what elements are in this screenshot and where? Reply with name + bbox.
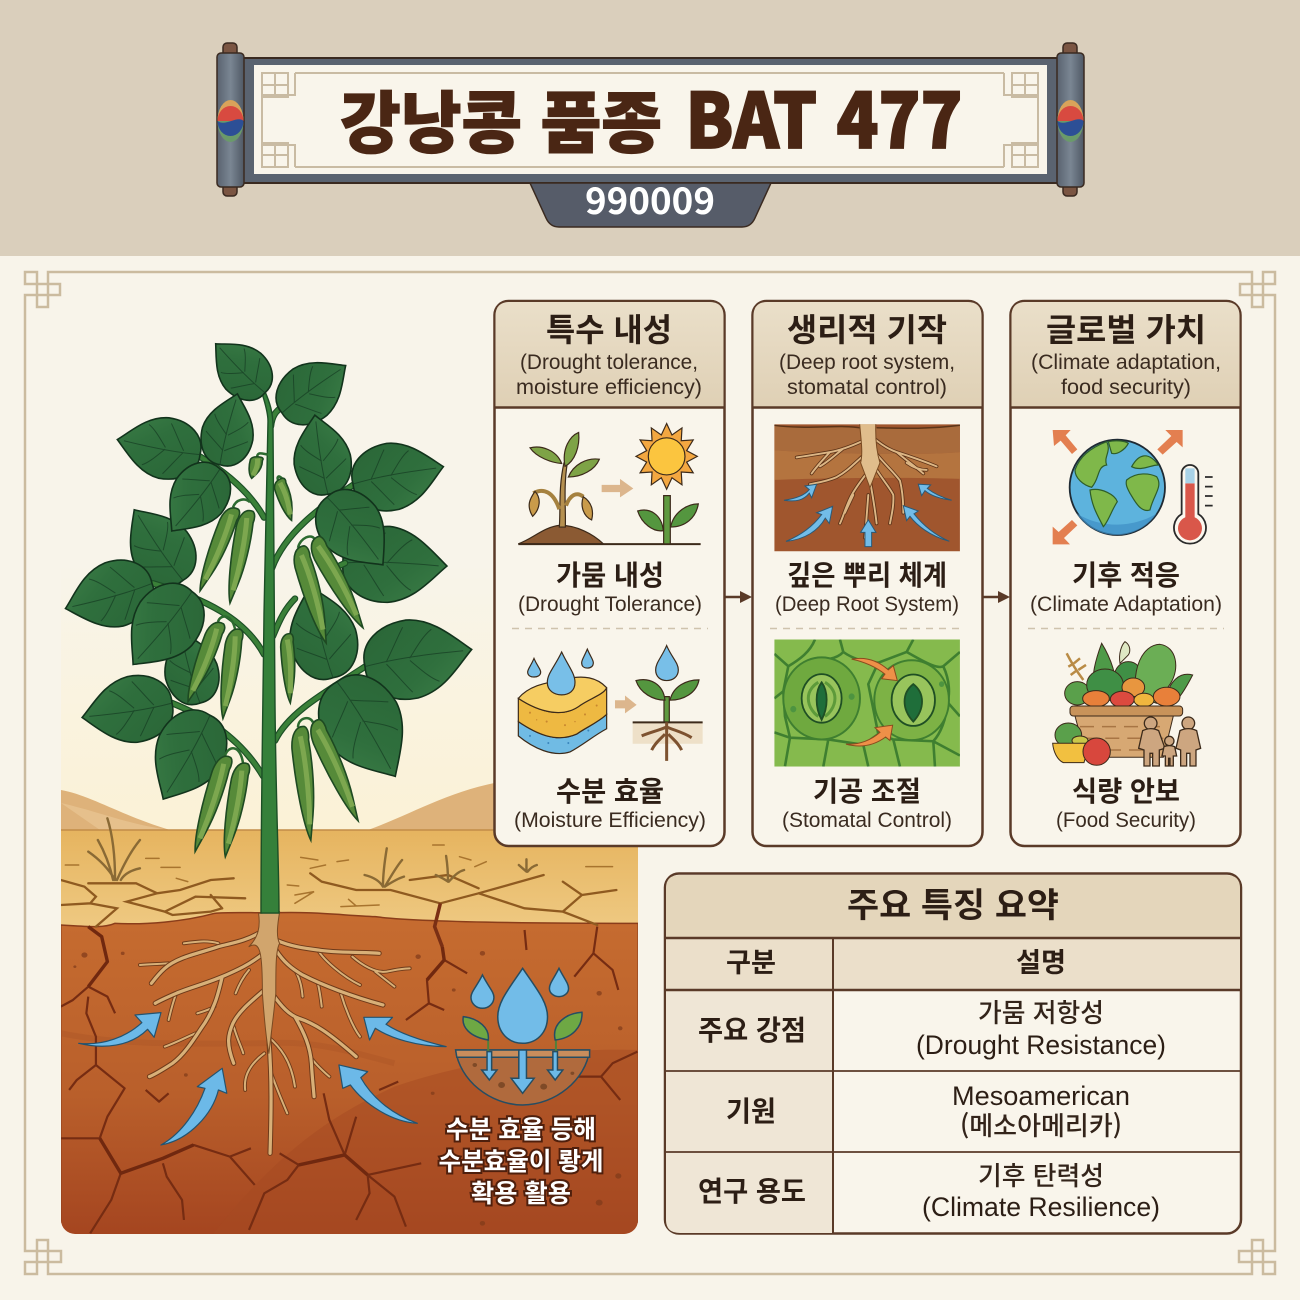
right scroll roller [1057,43,1084,196]
bean plant [57,326,478,913]
row: 연구 용도: (Climate Resilience) [922,1192,1160,1222]
row: 연구 용도: 연구 용도 [698,1170,806,1210]
row: 주요 강점: 가뭄 저항성 [978,993,1104,1030]
item title: (Deep Root System) [775,593,959,616]
icon: globe and thermometer [1053,430,1213,544]
panel heading [779,305,955,399]
panel heading: (Deep root system, [779,351,955,374]
panel heading: 생리적 기작 [787,305,947,351]
front leaves [57,326,478,816]
grass tufts [88,818,537,887]
item title: (Climate Adaptation) [1030,593,1222,616]
item title: 기공 조절 [813,770,921,810]
panel: 특수 내성 [494,301,724,846]
panel heading: (Climate adaptation, [1031,351,1221,374]
root system [140,912,410,1153]
row: 주요 강점 [698,993,1166,1060]
panel heading: food security) [1061,376,1191,399]
table title: 주요 특징 요약 [847,878,1059,927]
desert hills [61,781,505,830]
arrow: panel 2 to 3 [983,591,1010,603]
code tab [530,173,771,227]
row: 연구 용도: 기후 탄력성 [978,1156,1104,1193]
item title [775,554,959,616]
soil caption [438,1110,604,1210]
item title: (Drought Tolerance) [518,593,702,616]
panel heading: moisture efficiency) [516,376,702,399]
summary table [665,874,1241,1234]
table header [726,941,1066,980]
row: 주요 강점: 주요 강점 [698,1009,806,1049]
title scroll banner [217,43,1084,196]
panel heading: stomatal control) [787,376,947,399]
left scroll roller [217,43,244,196]
water retention icon [456,968,590,1105]
item title: (Moisture Efficiency) [514,809,706,832]
item title: (Food Security) [1056,809,1196,832]
title text [340,60,962,170]
soil caption: 수분 효율 등해 [446,1110,596,1146]
item title [1030,554,1222,616]
item title: (Stomatal Control) [782,809,952,832]
item title: 깊은 뿌리 체계 [787,554,947,594]
item title: 기후 적응 [1072,554,1180,594]
panel heading: 특수 내성 [546,305,672,351]
row: 주요 강점: (Drought Resistance) [916,1030,1166,1060]
stem and branches [153,392,365,913]
item title [514,770,706,832]
row: 기원 [726,1081,1130,1143]
icon: drought tolerance [518,424,701,544]
panel: 생리적 기작 [752,301,982,846]
item title [518,554,702,616]
icon: food basket and family [1053,642,1201,766]
icon: stomata [774,640,960,767]
panel heading: 글로벌 가치 [1046,305,1206,351]
panel: 글로벌 가치 [1010,301,1240,846]
row: 기원: Mesoamerican [952,1081,1130,1111]
code tab: 990009 [585,173,715,225]
arrow: panel 1 to 2 [725,591,752,603]
row: 기원: 기원 [726,1090,776,1130]
item title: 가뭄 내성 [556,554,664,594]
plant scene background [61,669,638,1234]
item title: 수분 효율 [556,770,664,810]
dry ground and soil with cracks [61,830,639,1247]
title text: 강낭콩 품종 [340,70,662,167]
ornamental page frame [25,272,1275,1274]
header band [0,0,1300,256]
rear leaves [109,492,448,710]
row: 연구 용도 [698,1156,1160,1222]
panel heading [1031,305,1221,399]
water uptake arrows [79,1013,446,1145]
table header: 구분 [726,941,776,980]
soil caption: 확용 활용 [471,1174,571,1210]
item title [782,770,952,832]
soil caption: 수분효율이 뢍게 [438,1142,604,1178]
icon: moisture efficiency [518,646,703,761]
title text: BAT 477 [686,60,962,170]
icon: deep roots in soil [774,419,960,551]
panel heading [516,305,702,399]
item title [1056,770,1196,832]
row: 기원: (메소아메리카) [960,1106,1122,1143]
bean pods [182,453,373,858]
item title: 식량 안보 [1072,770,1180,810]
panel heading: (Drought tolerance, [520,351,698,374]
table header: 설명 [1016,941,1066,980]
